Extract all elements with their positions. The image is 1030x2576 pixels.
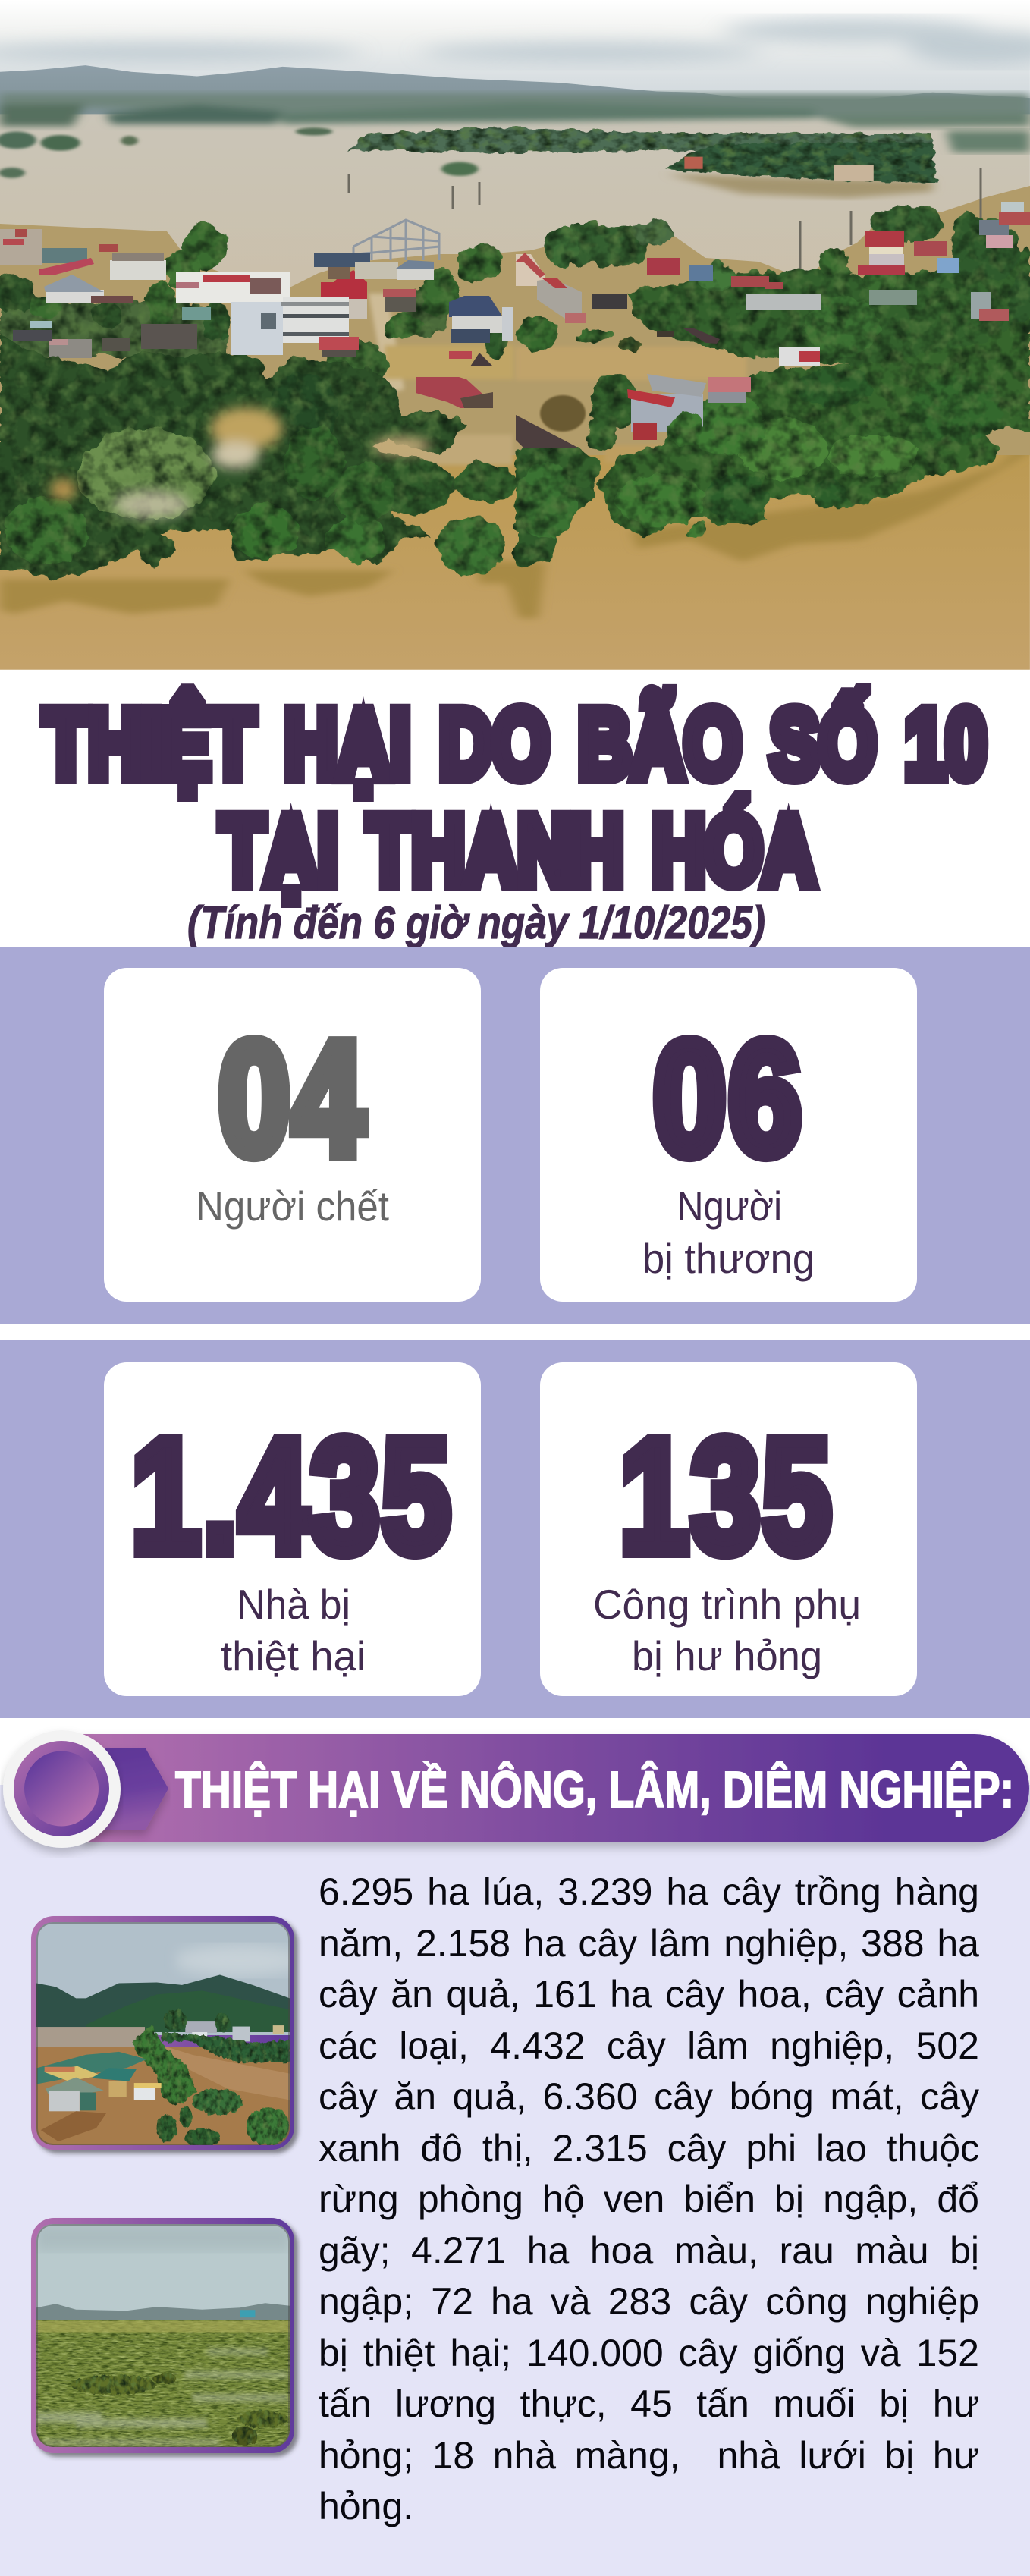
card: auxiliary structures — [540, 1362, 917, 1696]
body text: agriculture damage figures: bị thiệt hại; 140.000 cây giống và 152 — [319, 2332, 979, 2374]
blue building — [240, 2310, 255, 2317]
card: damaged houses: thiệt hại — [221, 1632, 366, 1679]
water gaps in foliage — [50, 407, 431, 518]
flattened rice clumps — [71, 2373, 288, 2446]
body text: agriculture damage figures: cây ăn quả, 161 ha cây hoa, cây cảnh — [319, 1973, 979, 2015]
poles — [349, 168, 981, 291]
body text: agriculture damage figures: gãy; 4.271 ha hoa màu, rau màu bị — [319, 2229, 979, 2271]
teal roofs — [37, 2052, 162, 2111]
main foliage masses — [0, 316, 1030, 579]
flooded village ground — [0, 186, 1030, 455]
body text: agriculture damage figures: xanh đô thị, 2.315 cây phi lao thuộc — [319, 2127, 979, 2169]
body text: agriculture damage figures: hỏng; 18 nhà màng, nhà lưới bị hư — [319, 2433, 979, 2476]
lighter and individual crowns — [0, 368, 1001, 575]
body text: agriculture damage figures: tấn lương thực, 45 tấn muối bị hư — [319, 2383, 979, 2425]
water patches — [36, 2349, 288, 2445]
village houses — [0, 202, 1030, 408]
sky — [36, 1922, 290, 2035]
body text: agriculture damage figures — [319, 1871, 979, 2527]
card: auxiliary structures: bị hư hỏng — [632, 1632, 822, 1679]
card: deaths: 04 — [218, 1008, 366, 1188]
field — [36, 2320, 290, 2447]
tree line — [36, 2303, 290, 2320]
card: damaged houses — [104, 1362, 481, 1696]
card: damaged houses: 1.435 — [131, 1407, 453, 1586]
card: injured: Người — [677, 1183, 782, 1230]
hero photo: flooded village aerial view — [0, 14, 1030, 670]
body text: agriculture damage figures: ngập; 72 ha và 283 cây công nghiệp — [319, 2280, 979, 2323]
reflections on flood water — [0, 435, 1030, 618]
card: injured: bị thương — [642, 1235, 815, 1282]
title — [39, 683, 989, 947]
upper flood water — [0, 114, 1030, 445]
title line 2: TẠI THANH HÓA — [220, 796, 815, 905]
far islands — [0, 93, 1030, 198]
trees — [131, 2009, 290, 2147]
body text: agriculture damage figures: hỏng. — [319, 2485, 413, 2527]
card: injured: 06 — [653, 1008, 804, 1188]
card: deaths: Người chết — [196, 1183, 389, 1230]
hexagon arrow — [76, 1748, 168, 1830]
river — [36, 2027, 146, 2047]
houses amid the trees — [516, 347, 820, 448]
reflection — [41, 2111, 106, 2141]
mid-tier vegetation — [0, 220, 1030, 387]
photo frame: flattened rice field — [31, 2218, 302, 2461]
circle badge — [3, 1730, 121, 1848]
body text: agriculture damage figures: cây ăn quả, 6.360 cây bóng mát, cây — [319, 2075, 979, 2118]
body text: agriculture damage figures: rừng phòng hộ ven biển bị ngập, đổ — [319, 2178, 979, 2220]
flood road and water patches — [369, 294, 914, 465]
title line 1: THIỆT HẠI DO BÃO SỐ 10 — [43, 690, 987, 799]
body text: agriculture damage figures: năm, 2.158 ha cây lâm nghiệp, 388 ha — [319, 1922, 979, 1965]
panel: property damage — [0, 1340, 1030, 1718]
sky — [0, 0, 1030, 130]
card: auxiliary structures: Công trình phụ — [593, 1581, 861, 1628]
section banner — [0, 1730, 1030, 1858]
card: auxiliary structures: 135 — [620, 1407, 834, 1586]
overcast sky — [36, 2224, 290, 2311]
card: injured — [540, 968, 917, 1302]
remaining foreground tree — [668, 412, 705, 445]
panel: casualties — [0, 947, 1030, 1324]
subtitle: (Tính đến 6 giờ ngày 1/10/2025) — [187, 897, 765, 947]
card: damaged houses: Nhà bị — [237, 1581, 350, 1628]
mountains — [36, 1975, 290, 2032]
body text: agriculture damage figures: các loại, 4.432 cây lâm nghiệp, 502 — [319, 2024, 979, 2066]
photo frame: flooded houses — [31, 1916, 302, 2157]
brown flood water — [36, 2047, 290, 2145]
steel frame — [353, 220, 439, 260]
banner bar — [83, 1734, 1029, 1842]
lower flood water — [0, 435, 1030, 670]
buildings far — [185, 2021, 284, 2041]
card: deaths — [104, 968, 481, 1302]
body text: agriculture damage figures: 6.295 ha lúa, 3.239 ha cây trồng hàng — [319, 1871, 979, 1913]
background trees — [0, 206, 1030, 386]
distant mountains — [0, 65, 1030, 130]
panel: agriculture background — [0, 1785, 1030, 2576]
